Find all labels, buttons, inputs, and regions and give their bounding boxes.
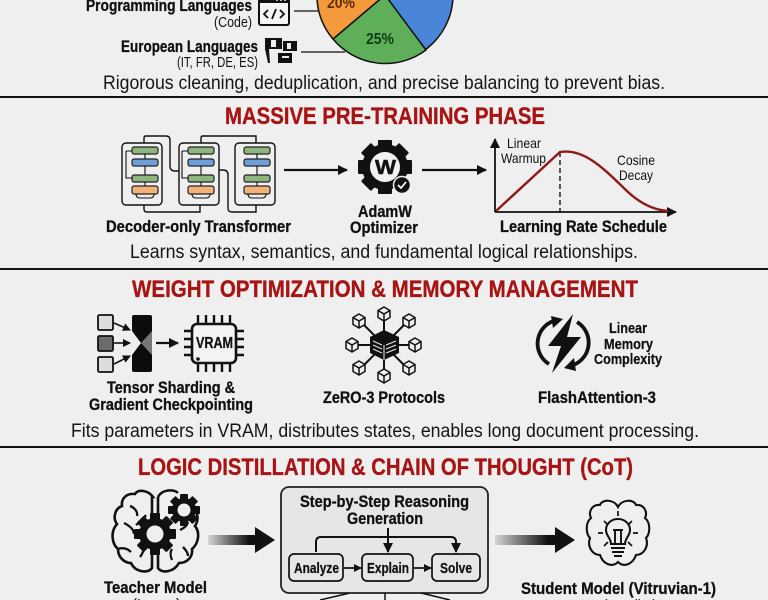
caption: weight optimization: Fits parameters in VRAM, distributes states, enables long document processing. [71, 421, 699, 442]
icon: adamw gear [358, 140, 412, 194]
icon: student brain with bulb [587, 501, 649, 565]
arrow: explain to solve [414, 567, 431, 569]
label: linear memory complexity [594, 321, 662, 368]
label: adamw optimizer [350, 203, 419, 237]
arrow: teacher to reasoning [208, 527, 275, 553]
leader line: programming languages [294, 10, 318, 12]
step: analyze [289, 554, 343, 581]
chart: learning rate schedule: Linear [507, 135, 541, 151]
icon: flags [265, 38, 297, 63]
lines below reasoning box [320, 593, 450, 600]
arrow: optimizer to schedule [422, 169, 486, 171]
label: linear memory complexity: Linear [609, 321, 647, 337]
label: flashattention-3: FlashAttention-3 [538, 389, 656, 407]
pie chart [317, 0, 453, 64]
step: explain [362, 554, 413, 581]
step: solve [432, 554, 480, 581]
panel: massive pre-training phase [106, 103, 676, 263]
label: reasoning title: Generation [347, 510, 423, 528]
label: european languages: (IT, FR, DE, ES) [177, 54, 258, 71]
label: programming languages: (Code) [214, 14, 252, 31]
leader line: european languages [301, 51, 345, 53]
arrow: transformer to optimizer [284, 169, 347, 171]
chart: learning rate schedule: Warmup [501, 150, 546, 166]
label: reasoning title [300, 493, 469, 528]
diagram: decoder-only transformer [122, 136, 275, 212]
pie value: 25%: 25% [366, 31, 394, 48]
label: teacher model: Teacher Model [104, 579, 207, 597]
step: analyze: Analyze [294, 560, 339, 577]
label: adamw optimizer: Optimizer [350, 219, 419, 237]
caption: data balancing: Rigorous cleaning, deduplication, and precise balancing to prevent bias. [103, 73, 665, 94]
label: tensor sharding: Gradient Checkpointing [89, 396, 253, 414]
heading: logic distillation: LOGIC DISTILLATION & CHAIN OF THOUGHT (CoT) [138, 454, 633, 481]
step: explain: Explain [367, 560, 409, 577]
panel: data balancing [86, 0, 665, 94]
step: solve: Solve [440, 560, 472, 577]
panel: logic distillation and chain of thought [104, 454, 716, 600]
heading: weight optimization: WEIGHT OPTIMIZATION & MEMORY MANAGEMENT [132, 276, 638, 303]
label: zero-3 protocols: ZeRO-3 Protocols [323, 389, 445, 407]
arrow: reasoning to student [495, 527, 575, 553]
label: learning rate schedule: Learning Rate Schedule [500, 218, 667, 236]
icon: code window [259, 0, 289, 25]
label: tensor sharding: Tensor Sharding & [107, 379, 235, 397]
chart: learning rate schedule: Decay [619, 167, 653, 183]
chart: learning rate schedule [495, 135, 676, 212]
icon: zero-3 network [346, 307, 421, 383]
icon: tensor sharding to vram [98, 315, 244, 372]
chart: learning rate schedule: Cosine [617, 152, 655, 168]
caption: pre-training: Learns syntax, semantics, and fundamental logical relationships. [130, 242, 638, 263]
panel: weight optimization and memory management [71, 276, 699, 442]
label: tensor sharding [89, 379, 253, 414]
arrow: analyze to explain [344, 567, 361, 569]
label: reasoning title: Step-by-Step Reasoning [300, 493, 469, 511]
icon: adamw gear: W [375, 157, 396, 179]
icon: tensor sharding to vram: VRAM [196, 335, 233, 352]
label: linear memory complexity: Complexity [594, 352, 662, 368]
label: adamw optimizer: AdamW [358, 203, 412, 221]
arrows: branching to steps [316, 528, 456, 552]
label: student model: Student Model (Vitruvian-1) [521, 580, 716, 598]
label: programming languages [86, 0, 252, 31]
icon: lightning cycle [538, 314, 589, 373]
icon: teacher brain with gears [113, 490, 200, 571]
label: decoder-only transformer: Decoder-only Transformer [106, 218, 292, 236]
label: linear memory complexity: Memory [604, 337, 653, 353]
label: european languages: European Languages [121, 38, 258, 56]
heading: massive pre-training phase: MASSIVE PRE-TRAINING PHASE [225, 103, 545, 130]
panel: step-by-step reasoning generation [281, 487, 488, 593]
label: european languages [121, 38, 258, 71]
